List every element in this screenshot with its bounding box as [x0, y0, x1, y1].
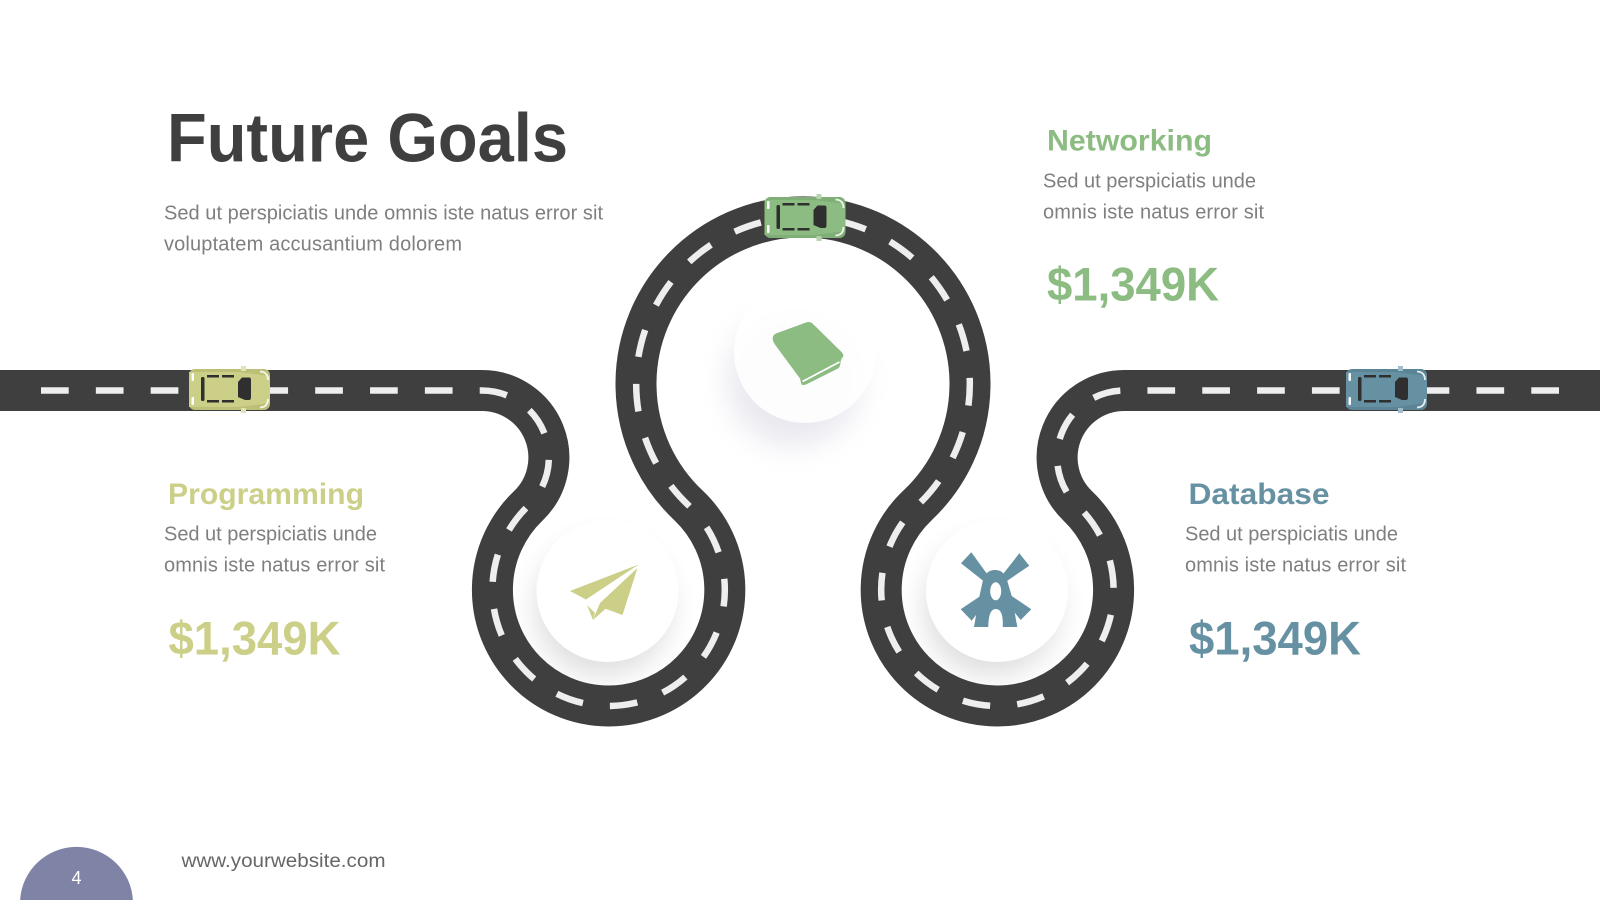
- value: networking: $1,349K: [1047, 258, 1219, 310]
- icon: book: [773, 322, 843, 385]
- winding road: [0, 217, 1600, 706]
- page number badge: [20, 847, 133, 900]
- body: programming: Sed ut perspiciatis unde: [164, 524, 377, 546]
- panel: programming: [164, 478, 385, 664]
- heading: database: Database: [1188, 478, 1330, 511]
- disc: book: [728, 281, 876, 446]
- panel: networking: [1043, 124, 1264, 310]
- website url: www.yourwebsite.com: [180, 851, 386, 872]
- value: database: $1,349K: [1189, 612, 1361, 664]
- body: database: [1185, 524, 1406, 576]
- body: networking: [1043, 170, 1264, 224]
- icon: paper plane: [570, 564, 639, 620]
- body: database: omnis iste natus error sit: [1185, 554, 1406, 576]
- heading: networking: Networking: [1047, 124, 1212, 158]
- car: green: [764, 194, 846, 241]
- page number badge: 4: [71, 868, 82, 888]
- car: yellow: [189, 366, 270, 413]
- intro text: [164, 202, 603, 256]
- car: blue: [1346, 366, 1427, 413]
- disc: paper plane: [535, 520, 678, 676]
- body: programming: omnis iste natus error sit: [164, 554, 385, 576]
- title: Future Goals: [167, 100, 568, 176]
- disc: windmill: [924, 520, 1068, 676]
- heading: programming: Programming: [168, 478, 364, 511]
- body: programming: [164, 524, 385, 576]
- icon discs: [535, 281, 1068, 676]
- body: networking: omnis iste natus error sit: [1043, 202, 1264, 224]
- intro text: voluptatem accusantium dolorem: [164, 234, 462, 256]
- value: programming: $1,349K: [168, 612, 341, 664]
- icon: windmill: [961, 552, 1031, 627]
- body: database: Sed ut perspiciatis unde: [1185, 524, 1398, 546]
- intro text: Sed ut perspiciatis unde omnis iste natus error sit: [164, 202, 603, 224]
- panel: database: [1185, 478, 1406, 664]
- body: networking: Sed ut perspiciatis unde: [1043, 170, 1256, 192]
